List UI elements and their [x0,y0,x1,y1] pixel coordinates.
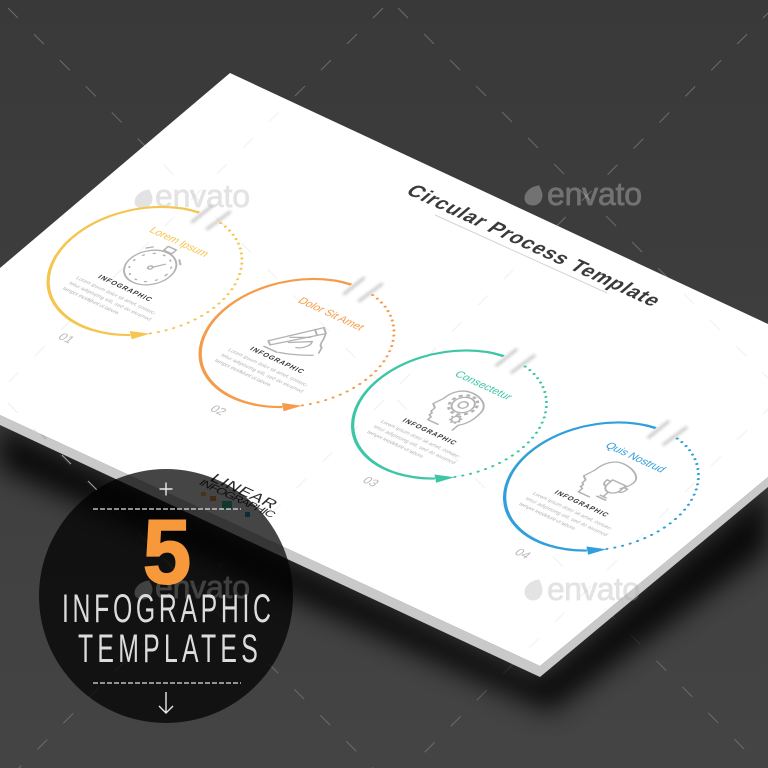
icon: stopwatch [113,239,192,291]
arrowhead [276,399,302,415]
big number 5: 5 [143,502,191,603]
badge heading line 2: TEMPLATES [78,627,258,672]
body text [213,348,311,400]
dotted arc [262,295,433,417]
dotted arc [110,223,281,345]
gap shadows [344,278,382,301]
body text: tempor incididunt ut labore. [61,286,121,316]
faint marks on paper [8,112,768,648]
body text: Lorem ipsum dolor sit amet, consec- [531,491,614,532]
body text [517,491,615,543]
body text: tempor incididunt ut labore. [517,502,578,532]
step title: Quis Nostrud [602,441,668,475]
watermark: envato top right: envato [547,176,642,212]
arrowhead [581,542,606,558]
step title: Lorem Ipsum [146,225,211,259]
step number: 03 [359,474,382,489]
step number: 02 [207,403,230,418]
step title: Consectetur [452,369,515,402]
body text: tetur adipiscing elit, sed do eiusmod [219,353,304,394]
badge heading line 1: INFOGRAPHIC [62,587,271,632]
top dashed divider [93,508,241,510]
body text [61,276,159,328]
solid arc [160,255,400,416]
step 4 circle: Quis Nostrud [445,399,738,592]
diagonal marks on paper side [37,430,97,490]
body text: Lorem ipsum dolor sit amet, consec- [74,276,158,316]
gap shadows [496,350,534,372]
dotted arc [567,439,737,560]
body text [365,419,463,471]
title underline [435,215,607,293]
arrowhead [124,327,150,343]
watermark: envato top left: envato [155,178,250,214]
arrowhead [429,470,454,486]
label: INFOGRAPHIC [248,346,305,375]
label: INFOGRAPHIC [400,418,457,446]
step number: 04 [511,546,534,561]
paper shadow [0,425,768,712]
body text: Lorem ipsum dolor sit amet, consec- [226,348,310,388]
icon: head with gears [419,385,493,433]
step 1 circle: Lorem Ipsum [0,183,281,376]
next sheet heading: Linear Infographic [196,472,281,520]
down arrow icon [159,692,173,713]
white paper sheet [0,73,768,666]
gap shadows [192,206,230,229]
dotted arc [415,367,585,488]
label: INFOGRAPHIC [96,274,153,303]
coloured blocks [201,492,250,517]
watermark: envato under badge text: envato [155,569,250,605]
badge circle [39,469,293,723]
solid arc [313,327,552,487]
title: Circular Process Template [401,181,666,310]
paper side edge [0,415,768,677]
body text: tempor incididunt ut labore. [213,358,273,388]
heading word: linear: LINEAR [206,472,281,511]
step title: Dolor Sit Amet [295,296,367,333]
gap shadows [648,422,686,444]
body text: tetur adipiscing elit, sed do eiusmod [67,281,152,322]
body text: tetur adipiscing elit, sed do eiusmod [523,497,609,538]
solid arc [8,183,248,344]
step 3 circle: Consectetur [293,327,586,520]
heading word: infographic: INFOGRAPHIC [196,477,279,520]
body text: Lorem ipsum dolor sit amet, consec- [379,419,462,460]
body text: tempor incididunt ut labore. [365,430,426,460]
bottom dashed divider [93,682,241,684]
label: INFOGRAPHIC [552,490,609,518]
body text: tetur adipiscing elit, sed do eiusmod [371,425,457,466]
watermark: envato bottom right: envato [547,571,640,607]
solid arc [465,399,704,559]
step number: 01 [55,331,78,346]
icon: head with trophy [570,456,645,506]
icon: hand with pencil [263,316,340,365]
step 2 circle: Dolor Sit Amet [140,255,433,448]
plus icon [160,482,172,496]
